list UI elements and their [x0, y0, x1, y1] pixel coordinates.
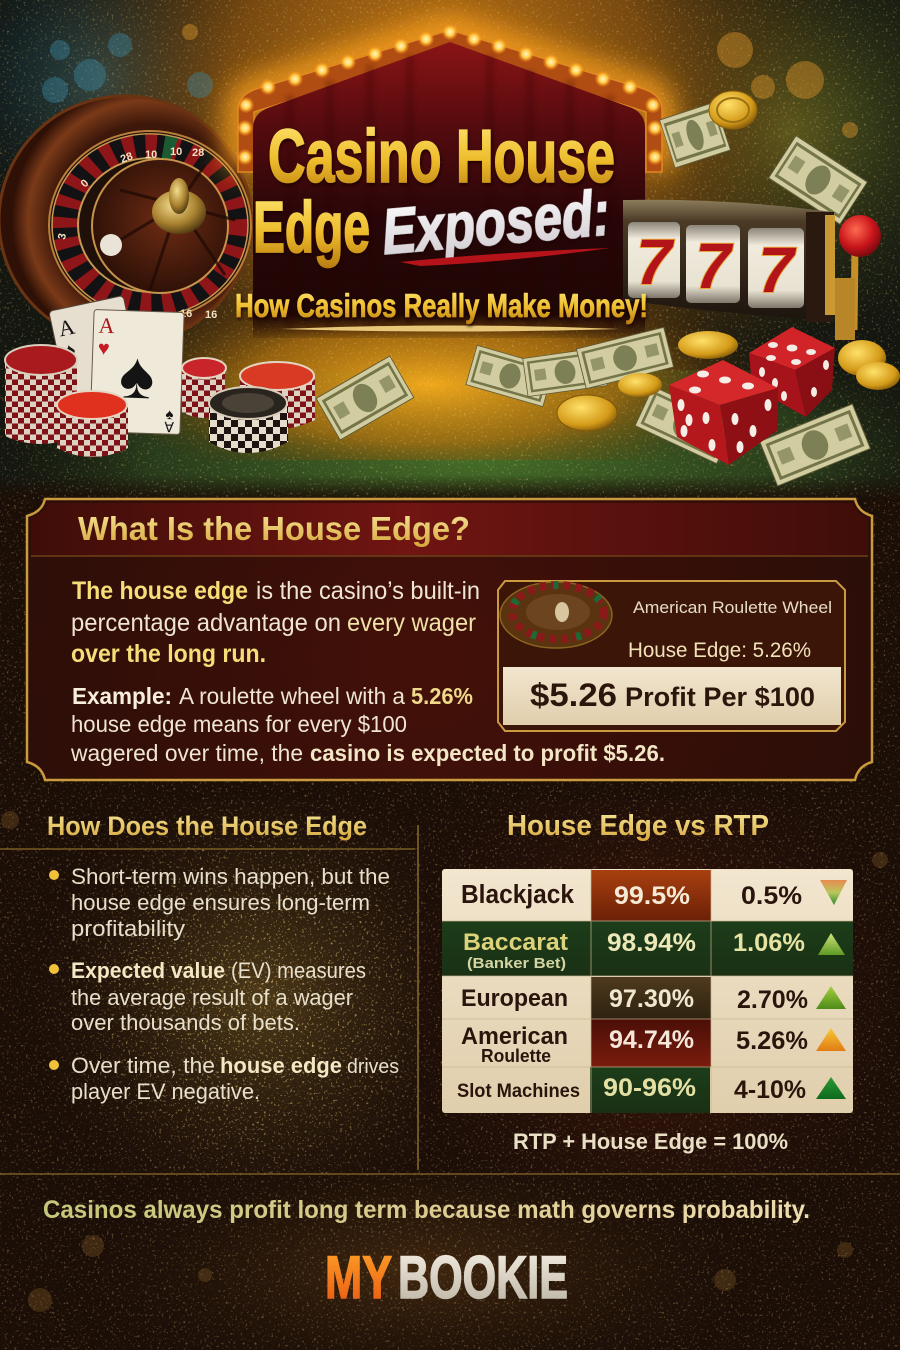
bullet 2: (EV) measures: [231, 958, 366, 983]
example text: 5.26%: [411, 683, 473, 709]
bullet 1: house edge ensures long-term: [71, 890, 370, 915]
row: american roulette: 5.26%: [736, 1027, 808, 1055]
definition text: every wager: [347, 609, 476, 637]
card: american roulette wheel: [498, 581, 845, 731]
example text: house edge means for every $100: [71, 711, 407, 737]
definition text: The house edge: [72, 577, 248, 605]
marquee sign: [237, 24, 663, 338]
row: baccarat: 98.94%: [607, 929, 696, 957]
example text: A roulette wheel with a: [179, 683, 405, 709]
bullet 1: profitability: [71, 916, 186, 941]
comparison table: [442, 869, 853, 1113]
row: european: [461, 977, 846, 1019]
example text: Example:: [72, 683, 172, 709]
row: european: 2.70%: [737, 986, 808, 1014]
roulette wheel: 16: [180, 308, 192, 320]
row: baccarat: 1.06%: [733, 929, 805, 957]
mybookie logo: MY: [325, 1244, 392, 1311]
bullet 2: [49, 958, 366, 1035]
slot machine: 7: [758, 234, 797, 306]
panel: what is the house edge: [27, 499, 872, 780]
row: slot machines: 90-96%: [603, 1074, 696, 1102]
roulette wheel: 28: [119, 150, 135, 166]
bullet 2: the average result of a wager: [71, 985, 353, 1010]
bullet 1: [49, 864, 390, 941]
roulette wheel: [0, 96, 251, 344]
flying bills and coins: [660, 91, 867, 224]
panel: house edge vs rtp: [442, 810, 853, 1154]
profit strip: [503, 667, 841, 725]
heading: What Is the House Edge?: [78, 510, 470, 547]
roulette wheel: 10: [170, 146, 182, 158]
header band: [31, 503, 868, 555]
row: blackjack: 99.5%: [614, 882, 690, 910]
bullet 3: [49, 1053, 399, 1104]
roulette wheel: 10: [145, 149, 157, 161]
title block: [235, 114, 648, 324]
row: american roulette: [461, 1019, 846, 1067]
row: european: European: [461, 985, 568, 1012]
roulette wheel: 16: [205, 309, 217, 321]
row: american roulette: Roulette: [481, 1046, 551, 1066]
bullet 3: house edge: [220, 1053, 342, 1078]
mybookie logo: [325, 1244, 568, 1311]
bullet 3: player EV negative.: [71, 1079, 260, 1104]
profit strip: Profit Per $100: [625, 682, 815, 712]
icon: roulette wheel: [500, 582, 612, 648]
title: Exposed: Exposed:: [379, 176, 612, 268]
roulette wheel: 3: [56, 232, 69, 241]
row: baccarat: [442, 921, 853, 976]
row: slot machines: 4-10%: [734, 1076, 806, 1104]
roulette wheel: 0: [79, 177, 91, 190]
chip stacks: [5, 345, 315, 457]
playing cards: [49, 296, 184, 436]
wheel label: American Roulette Wheel: [633, 599, 832, 617]
red dice: [669, 327, 835, 465]
mybookie logo: BOOKIE: [398, 1244, 568, 1311]
bullet 2: Expected value: [71, 958, 225, 983]
panel: how does the house edge: [0, 811, 415, 1104]
title: Edge: Edge: [253, 188, 370, 268]
subtitle: How Casinos Really Make Money!: [235, 287, 648, 324]
heading: How Does the House Edge: [47, 811, 367, 841]
row: european: 97.30%: [609, 985, 694, 1013]
playing cards: A: [56, 314, 77, 341]
definition text: percentage advantage on: [71, 609, 341, 637]
example text: wagered over time, the: [70, 740, 303, 766]
floor bills and coins: [316, 327, 900, 486]
definition text: [71, 577, 480, 668]
profit strip: $5.26: [530, 677, 617, 713]
row: slot machines: [457, 1067, 846, 1113]
playing cards: ∀: [164, 419, 175, 435]
slot machine: 7: [695, 230, 734, 302]
bullet 1: Short-term wins happen, but the: [71, 864, 390, 889]
row: slot machines: Slot Machines: [457, 1080, 580, 1102]
footer statement: Casinos always profit long term because math governs probability.: [43, 1196, 810, 1224]
slot machine: 7: [636, 226, 675, 298]
example text: [70, 683, 665, 766]
bullet 3: drives: [347, 1056, 399, 1078]
title: Casino House: Casino House: [268, 114, 615, 198]
hero illustration: [0, 24, 900, 486]
playing cards: ♥: [97, 338, 110, 360]
definition text: is the casino’s built-in: [256, 577, 480, 605]
playing cards: ♠: [165, 406, 174, 423]
row: baccarat: (Banker Bet): [467, 955, 566, 972]
bullet 3: Over time, the: [71, 1053, 215, 1078]
slot machine: [623, 200, 881, 340]
roulette wheel: 28: [192, 147, 204, 159]
row: blackjack: 0.5%: [741, 882, 802, 910]
definition text: over the long run.: [71, 640, 266, 668]
red swoosh underline: [400, 248, 610, 266]
row: baccarat: Baccarat: [463, 929, 568, 956]
example text: casino is expected to profit $5.26.: [310, 740, 665, 766]
row: american roulette: 94.74%: [609, 1026, 694, 1054]
playing cards: ♠: [118, 337, 156, 413]
row: blackjack: Blackjack: [461, 881, 575, 909]
heading: House Edge vs RTP: [507, 810, 769, 842]
row: american roulette: American: [461, 1023, 568, 1050]
formula: RTP + House Edge = 100%: [513, 1129, 788, 1154]
playing cards: ♠: [62, 339, 78, 363]
bullet 2: over thousands of bets.: [71, 1010, 300, 1035]
row: blackjack: [461, 870, 847, 921]
playing cards: A: [98, 313, 115, 338]
house edge label: House Edge: 5.26%: [628, 638, 811, 662]
